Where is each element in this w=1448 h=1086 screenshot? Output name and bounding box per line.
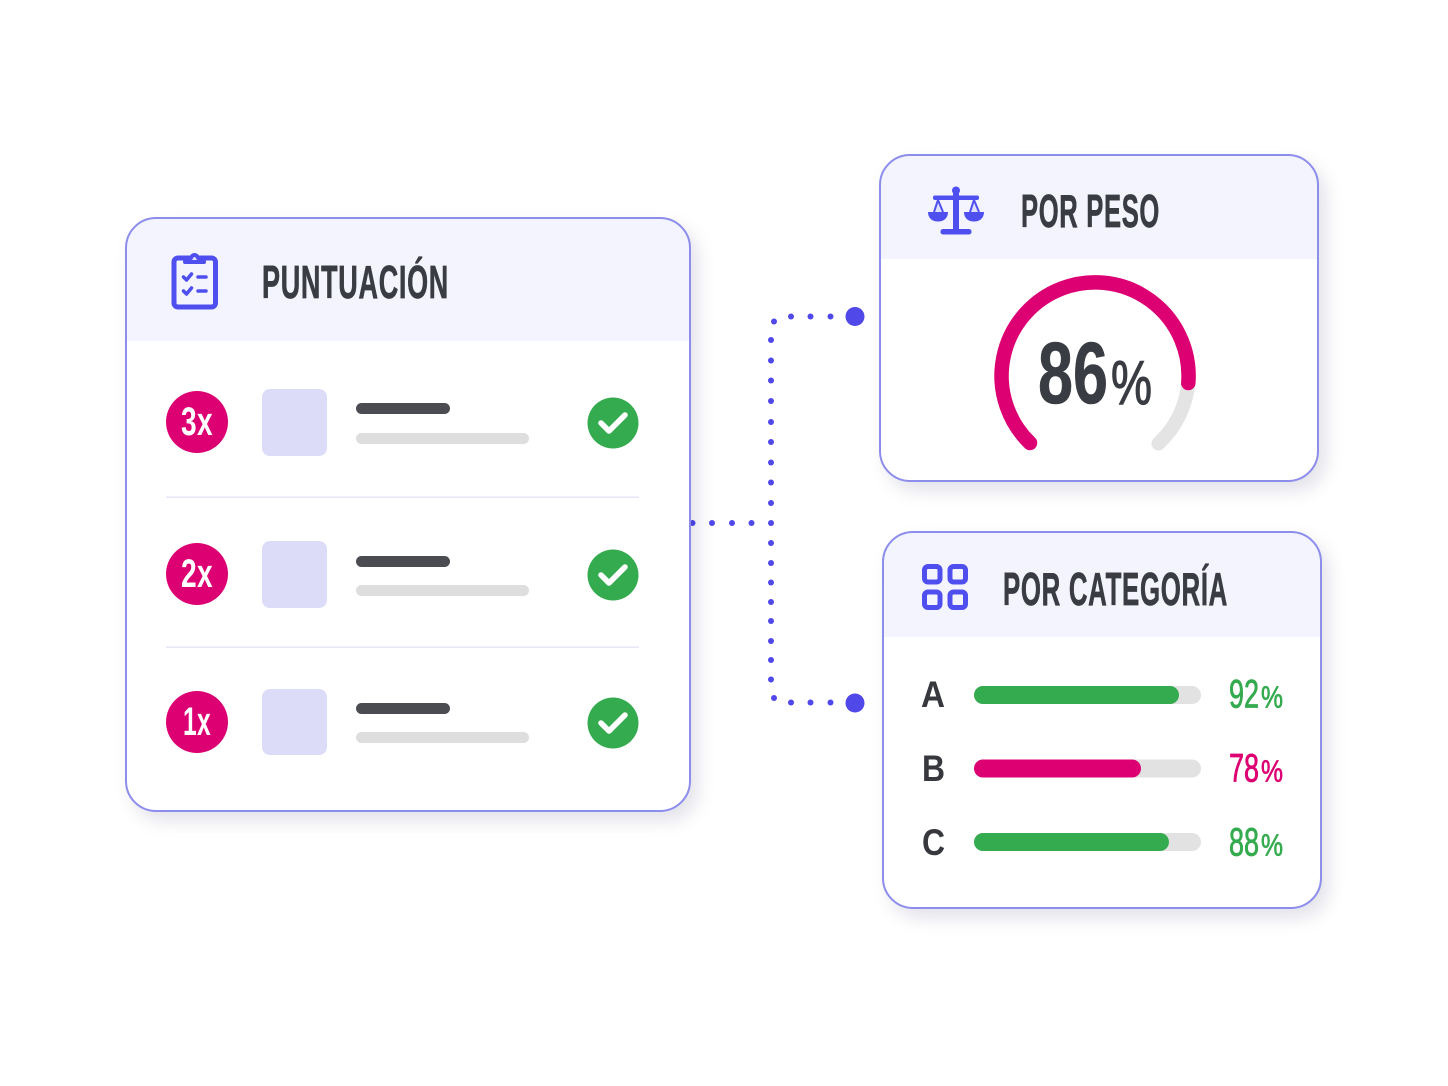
heading: por categoría: POR CATEGORÍA [1003,563,1228,615]
category C: C [922,822,945,863]
category B [922,746,1283,790]
icon: scales [928,186,984,234]
category A: % [1261,680,1283,714]
row 2x [166,541,638,608]
gauge: 86%: % [1111,349,1152,418]
category A [921,672,1283,716]
icon: grid [924,566,966,608]
category B: B [922,748,945,789]
category B: 78 [1229,746,1259,790]
gauge: 86% [1002,282,1189,444]
category C [922,820,1283,864]
category B: % [1261,754,1283,788]
heading: por peso: POR PESO [1021,185,1160,237]
row 2x: 2x [181,552,213,596]
icon: clipboard [174,255,216,307]
row 1x [166,689,638,755]
category A: 92 [1229,672,1259,716]
row 3x: 3x [181,400,213,444]
category C: % [1261,828,1283,862]
panel: por categoría [883,532,1321,908]
gauge: 86%: 86 [1038,325,1108,422]
heading: puntuación: PUNTUACIÓN [262,256,449,308]
category C: 88 [1229,820,1259,864]
row 3x [166,389,638,456]
category A: A [921,674,945,715]
row 1x: 1x [183,700,211,744]
panel: puntuación [126,218,690,811]
connector: dotted lines [690,307,864,712]
panel: por peso [880,155,1318,481]
